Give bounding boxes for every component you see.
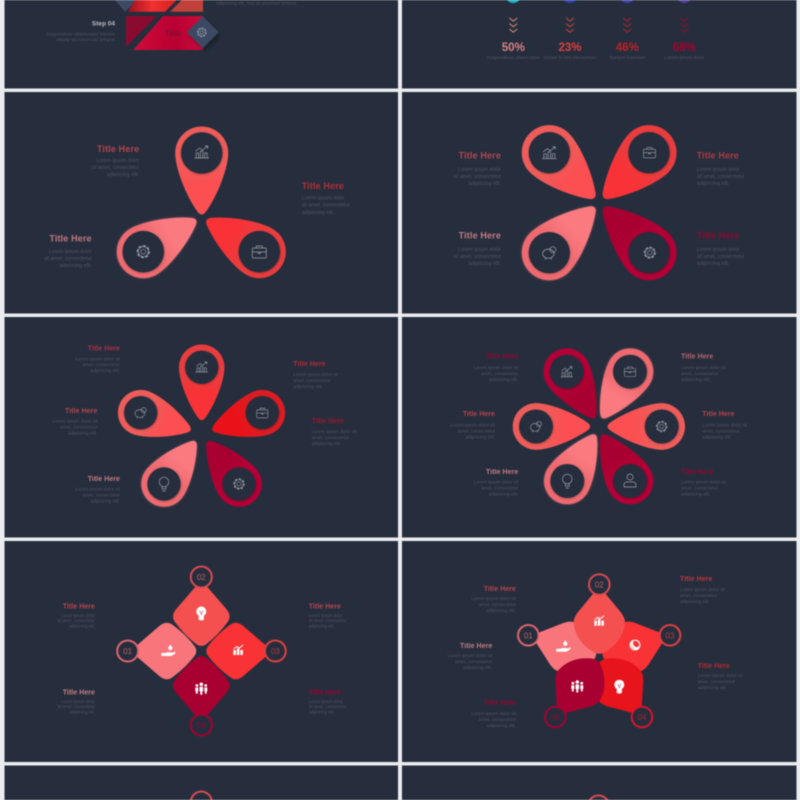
- text: 02 left: Title Here: [484, 586, 516, 593]
- text: chart: Title Here: [88, 346, 120, 352]
- panel: percentage columns (cropped): [402, 0, 796, 88]
- ring 03: [265, 640, 286, 662]
- text: briefcase: Lorem ipsum dolor: [697, 167, 740, 173]
- red step banner: [128, 0, 177, 12]
- text: 02 left: adipiscing elit.: [487, 608, 516, 613]
- text: 04 right: [698, 663, 743, 690]
- petal 04: [581, 645, 660, 727]
- step 04 banner: [133, 16, 203, 50]
- icon: bar chart: [233, 644, 243, 655]
- text: 04 right: Title Here: [309, 690, 341, 696]
- text: piggy bank: amet, consectetur: [60, 424, 98, 430]
- text: 01 left: [447, 643, 493, 670]
- ring 03: 03: [666, 631, 675, 640]
- text: 02 right: Title Here: [309, 604, 341, 610]
- column 3: 46%: [616, 42, 639, 54]
- text: lightbulb: adipiscing elit.: [91, 498, 120, 504]
- petal 02: [173, 584, 230, 646]
- text: chart: Title Here: [486, 354, 518, 360]
- icon: lightbulb: [614, 680, 624, 694]
- text: 05 left: adipiscing elit.: [487, 723, 516, 728]
- text: user: adipiscing elit.: [681, 492, 710, 496]
- text: 04 right: [309, 690, 347, 714]
- text: gear: [312, 418, 357, 446]
- text: chart: adipiscing elit.: [91, 368, 120, 373]
- icon: people: [571, 680, 583, 692]
- text: location marker: [473, 469, 519, 496]
- text: chart: [473, 354, 519, 382]
- text: briefcase: amet, consectetur: [681, 371, 719, 376]
- column 3: [609, 0, 645, 61]
- text: 02 left: Title Here: [63, 604, 95, 610]
- text: 02 left: sit amet, consectetur: [57, 618, 96, 623]
- text: gear: adipiscing elit.: [312, 441, 341, 446]
- text: piggy bank: [453, 230, 501, 267]
- step 04 text: aliquip ea commodo tempus: [56, 37, 116, 42]
- step 04 text: Step 04: [92, 20, 115, 28]
- column 1: Suspendisse ullamcorper: [486, 55, 541, 61]
- text: 02 right: sit amet, consectetur: [309, 618, 347, 623]
- pin: chart: [535, 340, 615, 430]
- petal 02: [574, 590, 625, 654]
- column 2: [544, 0, 596, 61]
- text: briefcase: adipiscing elit.: [302, 210, 334, 216]
- text: piggy bank: amet, consectetur: [458, 428, 495, 434]
- panel: bottom left (cropped): [4, 766, 398, 800]
- pin: briefcase: [193, 197, 296, 288]
- text: 03 right: Title Here: [680, 576, 712, 583]
- panel: three pins: [4, 92, 398, 314]
- text: 02 left: adipiscing elit.: [69, 624, 95, 628]
- pin: gear: [107, 197, 210, 288]
- text: 02 right: adipiscing elit.: [309, 624, 334, 628]
- text: gear: Lorem ipsum dolor: [697, 247, 740, 253]
- text: location marker: amet, consectetur: [481, 486, 519, 490]
- petal 04: [173, 656, 230, 718]
- text: chart: adipiscing elit.: [107, 172, 139, 178]
- pin: chart: [179, 345, 224, 420]
- text: 04 right: adipiscing elit.: [309, 710, 334, 714]
- pin: briefcase: [584, 114, 688, 217]
- text: lightbulb: Lorem ipsum dolor sit: [75, 486, 121, 492]
- text: user: [681, 469, 727, 496]
- text: 04 right: adipiscing elit.: [698, 685, 727, 690]
- text: briefcase: Lorem ipsum dolor: [302, 196, 345, 202]
- column 2: 23%: [558, 42, 582, 54]
- step 04 diamond with gear: [187, 16, 219, 48]
- text: gear: Lorem ipsum dolor sit: [312, 429, 357, 434]
- column 3: Tempor interdum: [609, 55, 645, 61]
- ring 04: [191, 714, 212, 736]
- column 4: 68%: [673, 42, 696, 54]
- text: chart: [91, 144, 140, 178]
- text: piggy bank: Title Here: [463, 411, 495, 418]
- text: piggy bank: [450, 411, 496, 440]
- ring 02: [191, 566, 212, 588]
- step 04 text: [46, 20, 116, 42]
- text: chart: sit amet, consectetur: [91, 165, 140, 171]
- text: gear: Title Here: [49, 234, 92, 244]
- pin: briefcase: [205, 384, 291, 451]
- text: 03 right: Lorem ipsum dolor sit: [680, 587, 726, 592]
- text: piggy bank: adipiscing elit.: [468, 261, 501, 267]
- ring 04: [632, 707, 652, 727]
- column 4: [664, 0, 705, 61]
- text: 05 left: amet, consectetur: [479, 717, 516, 722]
- text: piggy bank: Title Here: [65, 408, 97, 415]
- text: 02 right: Lorem ipsum dolor: [309, 613, 343, 618]
- panel: step list (cropped): [4, 0, 398, 88]
- pin: lightbulb: [132, 428, 214, 516]
- text: gear: Title Here: [312, 418, 344, 425]
- text: piggy bank: [52, 408, 98, 436]
- petal 03: [206, 623, 268, 679]
- petal 01: [134, 623, 196, 679]
- text: 01 left: sit amet, consectetur: [57, 704, 96, 709]
- text: chart: Title Here: [97, 144, 139, 154]
- text: 03 right: [680, 576, 726, 604]
- icon: bar chart: [594, 615, 604, 626]
- text: 01 left: Lorem ipsum dolor: [61, 699, 96, 704]
- pin: chart: [175, 126, 228, 214]
- pin: piggy bank: [112, 384, 198, 451]
- text: gear: amet, consectetur: [312, 435, 349, 440]
- text: briefcase: Lorem ipsum dolor sit: [681, 365, 727, 370]
- text: gear: [702, 411, 748, 440]
- ring fragment: [588, 796, 609, 800]
- text: chart: adipiscing elit.: [489, 377, 518, 382]
- text: 03 right: adipiscing elit.: [680, 599, 709, 604]
- icon: people: [195, 682, 207, 695]
- panel: five-petal star: [402, 541, 796, 762]
- text: 04 right: Lorem ipsum dolor: [309, 699, 343, 704]
- ring 01: [518, 625, 539, 646]
- text: 02 left: Lorem ipsum dolor: [61, 613, 96, 618]
- column 4: Lorem ipsum dolor: [664, 55, 705, 61]
- pin: piggy bank: [510, 188, 614, 292]
- panel: six pins: [402, 317, 796, 538]
- text: user: amet, consectetur: [681, 486, 719, 490]
- icon: phone: [630, 640, 640, 650]
- column 2: Donec in nisi elementum: [544, 55, 596, 61]
- text: 05 left: Lorem ipsum dolor sit: [471, 711, 517, 716]
- petal 01: [528, 612, 604, 681]
- column 1: 50%: [502, 42, 525, 54]
- text: location marker: Title Here: [486, 469, 518, 476]
- text: chart: Lorem ipsum dolor: [96, 158, 140, 164]
- text: piggy bank: Lorem ipsum dolor sit: [52, 418, 98, 424]
- text: lightbulb: Title Here: [88, 476, 120, 483]
- icon: hand: [556, 641, 570, 652]
- text: briefcase: Title Here: [697, 150, 739, 160]
- text: briefcase: adipiscing elit.: [681, 377, 710, 382]
- text: 01 left: [57, 690, 96, 714]
- text: 04 right: sit amet, consectetur: [309, 704, 347, 709]
- panel: five pins: [4, 317, 398, 538]
- text: gear: sit amet, consectetur: [44, 256, 92, 262]
- text: chart: Lorem ipsum dolor: [458, 167, 501, 173]
- text: 01 left: Lorem ipsum dolor sit: [447, 653, 493, 658]
- text: 01 left: amet, consectetur: [455, 659, 493, 664]
- text: briefcase: [293, 361, 339, 389]
- text: gear: amet, consectetur: [702, 428, 740, 434]
- petal 05: [539, 645, 618, 727]
- text: gear: adipiscing elit.: [702, 434, 732, 440]
- text: gear: adipiscing elit.: [697, 261, 729, 267]
- text: lightbulb: amet, consectetur: [83, 492, 120, 498]
- text: gear: Title Here: [702, 411, 735, 418]
- panel: four-petal diamond: [4, 541, 398, 762]
- text: piggy bank: Title Here: [459, 230, 501, 240]
- ring fragment: [191, 792, 212, 800]
- petal 03: [595, 612, 671, 681]
- text: briefcase: Title Here: [293, 361, 326, 368]
- ring 01: 01: [123, 647, 133, 656]
- pin: chart: [510, 114, 614, 217]
- text: 02 left: amet, consectetur: [479, 602, 516, 607]
- text: briefcase: Title Here: [681, 354, 713, 360]
- ring 01: 01: [524, 631, 533, 640]
- text: user: Lorem ipsum dolor sit: [681, 480, 727, 484]
- pin: piggy bank: [513, 403, 590, 450]
- step 03 text fragment: adipiscing elit, sed do eiusmod tempus: [216, 0, 297, 6]
- text: 02 left: Lorem ipsum dolor sit: [471, 596, 517, 601]
- text: piggy bank: adipiscing elit.: [466, 434, 495, 440]
- pin: gear: [608, 403, 685, 450]
- red step banner end: [170, 0, 203, 12]
- ring 02: 02: [197, 573, 206, 582]
- text: gear: [697, 230, 745, 267]
- text: chart: amet, consectetur: [83, 362, 120, 367]
- text: location marker: adipiscing elit.: [489, 492, 518, 496]
- text: gear: Title Here: [697, 230, 739, 240]
- ring 05: [545, 707, 566, 727]
- text: gear: [44, 234, 92, 269]
- pin: gear: [584, 188, 688, 292]
- ring 03: [660, 625, 680, 646]
- text: 01 left: Title Here: [63, 690, 95, 696]
- text: 01 left: adipiscing elit.: [69, 710, 95, 714]
- icon: lightbulb: [196, 606, 206, 620]
- ring 04: 04: [638, 713, 647, 722]
- text: briefcase: [302, 181, 350, 216]
- text: briefcase: adipiscing elit.: [697, 181, 729, 187]
- text: 02 left: [57, 604, 96, 628]
- text: briefcase: amet, consectetur: [293, 378, 331, 383]
- text: briefcase: sit amet, consectetur: [697, 174, 745, 180]
- text: 05 left: Title Here: [484, 700, 516, 707]
- text: briefcase: Title Here: [302, 181, 344, 191]
- text: briefcase: [681, 354, 727, 382]
- ring 05: 05: [551, 713, 560, 722]
- text: 01 left: adipiscing elit.: [463, 665, 492, 670]
- text: briefcase: sit amet, consectetur: [302, 202, 350, 208]
- text: 02 right: [309, 604, 347, 628]
- ring 02: [589, 574, 610, 595]
- text: 04 right: Lorem ipsum dolor sit: [698, 673, 743, 678]
- step diamond fragment: [115, 0, 138, 12]
- text: chart: [75, 346, 121, 373]
- step 04 text: Suspendisse ullamcorper lobortis: [46, 32, 116, 36]
- text: 01 left: Title Here: [460, 643, 492, 650]
- text: 04 right: Title Here: [698, 663, 730, 670]
- text: piggy bank: sit amet, consectetur: [453, 254, 501, 260]
- text: gear: adipiscing elit.: [59, 263, 92, 269]
- text: gear: sit amet, consectetur: [697, 254, 745, 260]
- pin: gear: [189, 428, 271, 516]
- text: 04 right: amet, consectetur: [698, 679, 735, 684]
- ring 02: 02: [595, 580, 604, 590]
- panel: four pins: [402, 92, 796, 314]
- text: chart: Lorem ipsum dolor sit: [75, 356, 121, 362]
- ring 04: 04: [197, 721, 206, 730]
- ring 03: 03: [271, 647, 280, 656]
- pin: briefcase: [582, 340, 662, 430]
- text: gear: Lorem ipsum dolor: [49, 249, 92, 255]
- text: chart: amet, consectetur: [481, 371, 519, 376]
- text: user: Title Here: [681, 469, 713, 476]
- icon: hand: [161, 645, 175, 656]
- pin: user: [582, 423, 662, 513]
- step 04 triangle: [126, 16, 157, 47]
- text: briefcase: [697, 150, 745, 187]
- text: location marker: Lorem ipsum dolor sit: [473, 480, 519, 484]
- text: lightbulb: [75, 476, 121, 504]
- text: piggy bank: Lorem ipsum dolor sit: [450, 422, 496, 428]
- text: chart: adipiscing elit.: [468, 181, 501, 187]
- text: chart: [453, 150, 501, 187]
- panel: bottom right (cropped): [402, 766, 796, 800]
- text: 02 left: [471, 586, 517, 613]
- text: 03 right: amet, consectetur: [680, 593, 718, 598]
- text: gear: Lorem ipsum dolor sit: [702, 422, 748, 428]
- ring 01: [117, 640, 138, 662]
- text: chart: sit amet, consectetur: [453, 174, 501, 180]
- text: chart: Title Here: [459, 150, 501, 160]
- text: piggy bank: Lorem ipsum dolor: [458, 247, 501, 253]
- text: briefcase: Lorem ipsum dolor sit: [293, 372, 339, 377]
- text: piggy bank: adipiscing elit.: [68, 430, 97, 436]
- step 04 banner label: Title: [165, 29, 182, 38]
- text: chart: Lorem ipsum dolor sit: [473, 365, 519, 370]
- text: 05 left: [471, 700, 517, 728]
- column 1: [486, 0, 541, 61]
- text: briefcase: adipiscing elit.: [293, 384, 323, 389]
- pin: location marker: [535, 423, 615, 513]
